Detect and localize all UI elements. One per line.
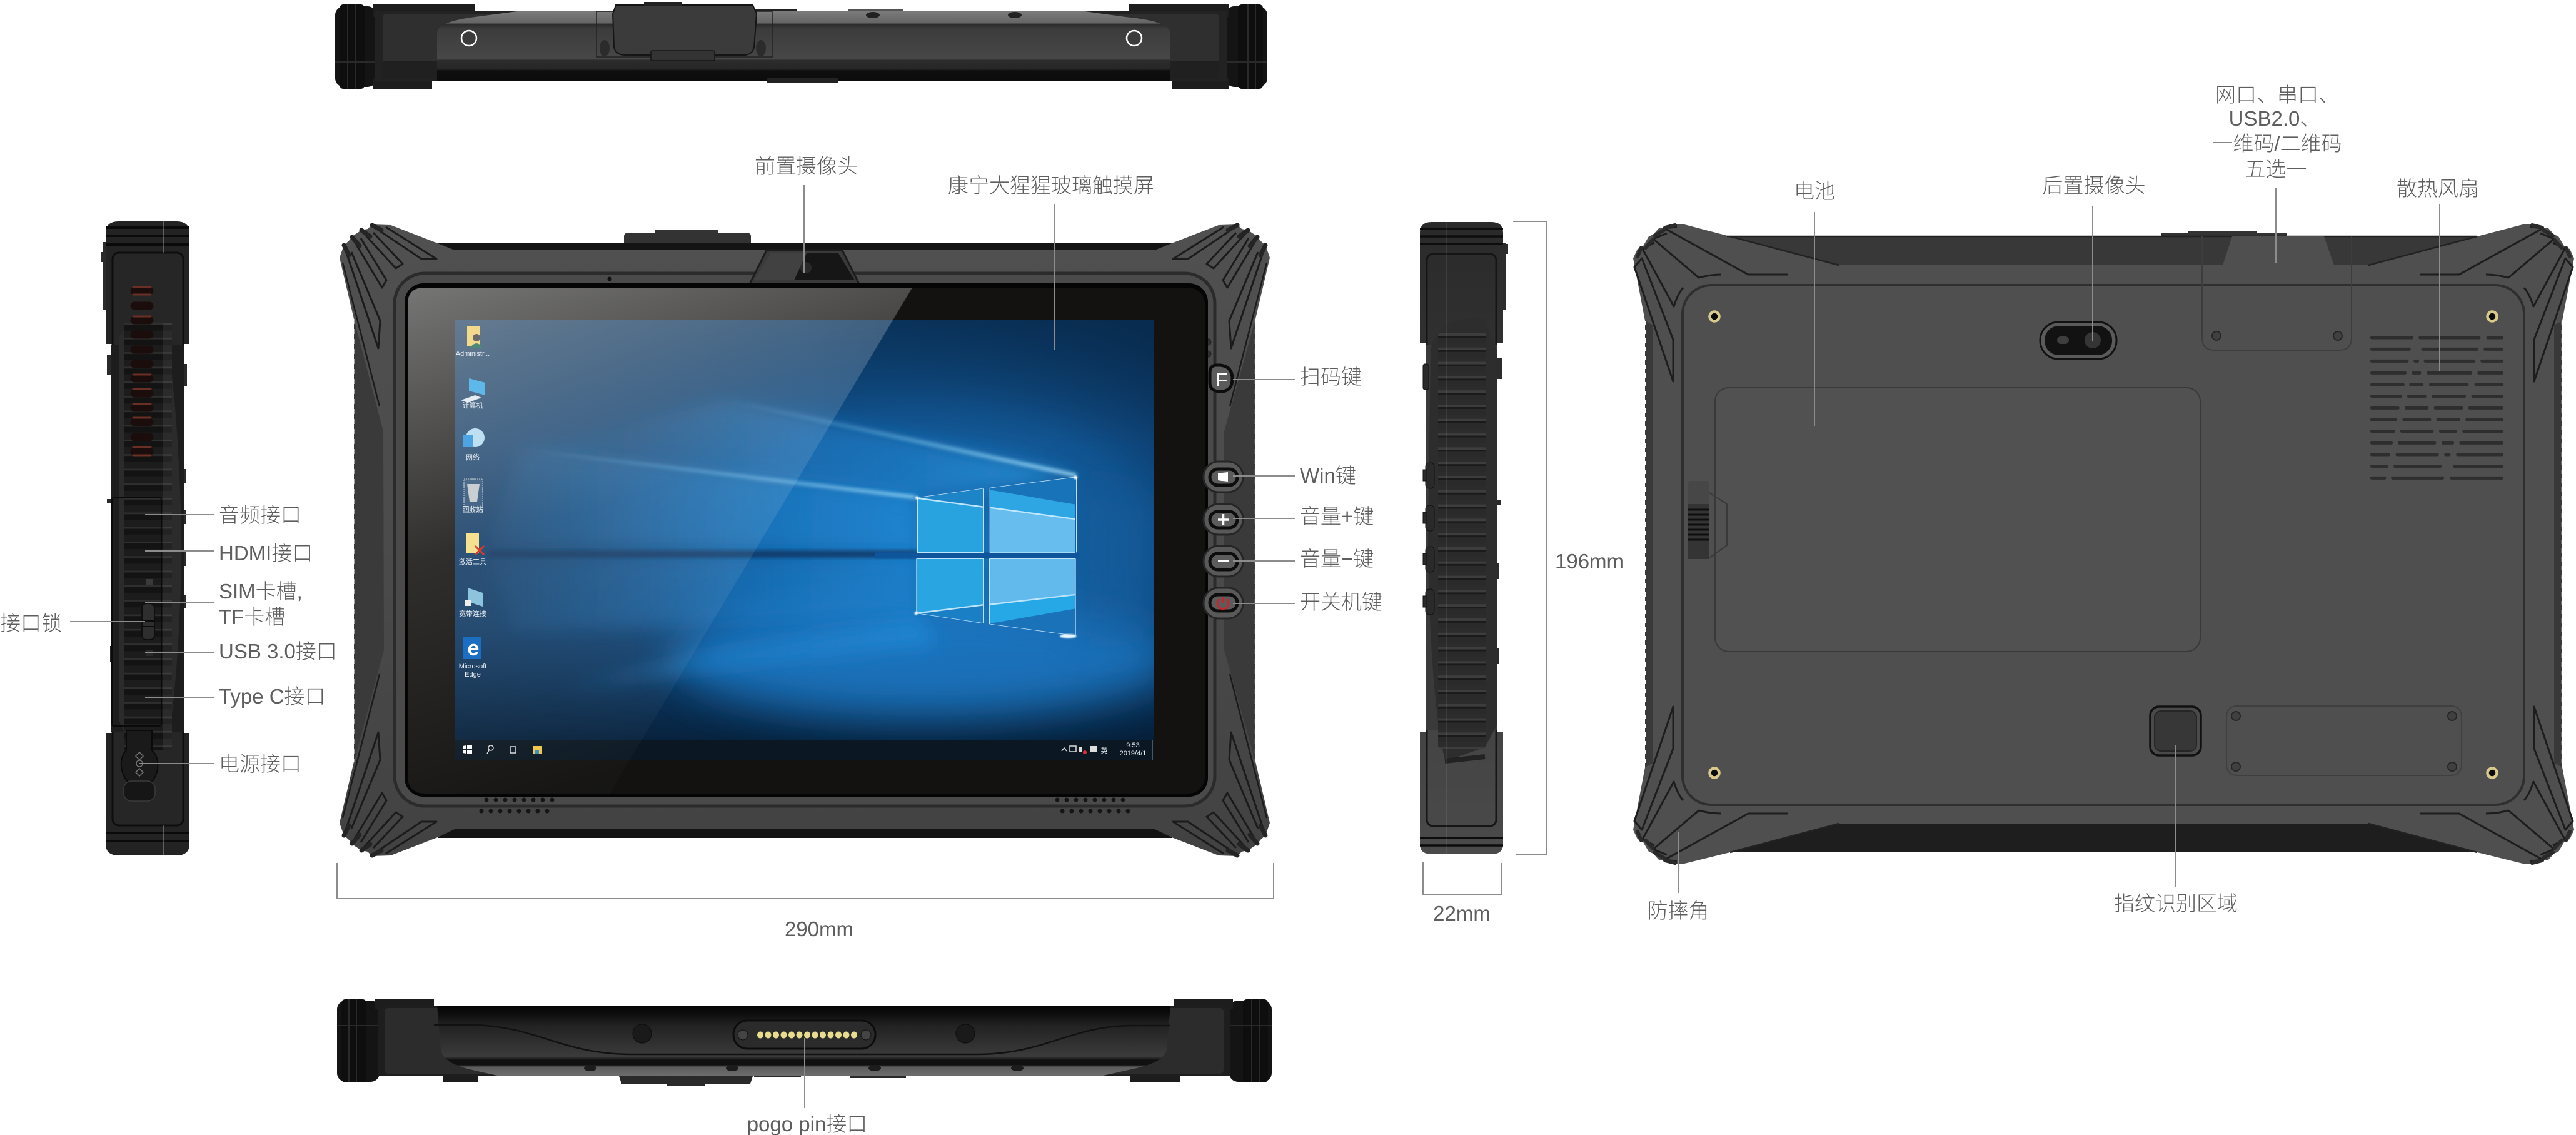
callouts: back view: 散热风扇	[2397, 177, 2479, 200]
callouts: left side view: SIM卡槽,	[219, 580, 303, 603]
callouts: left side view: USB 3.0接口	[219, 640, 337, 663]
callouts: back view	[1647, 83, 2479, 922]
end ribs	[335, 4, 1267, 89]
bulge and ribs	[119, 322, 181, 751]
black top and bottom bands	[438, 243, 1172, 838]
body	[378, 1006, 1230, 1076]
dimension: 196mm height: 196mm	[1555, 550, 1624, 573]
side buttons: F	[1216, 369, 1227, 391]
corner ribs	[343, 225, 436, 406]
taskbar icons and clock: 英	[1100, 746, 1108, 755]
inner plate	[1683, 285, 2524, 805]
callouts: left side view: Type C接口	[219, 685, 326, 708]
callouts: front view: 音量−键	[1300, 547, 1374, 570]
vents	[134, 291, 149, 451]
bottom latch	[619, 1076, 906, 1086]
right side studs	[1497, 243, 1508, 664]
side wedges	[1645, 321, 1653, 767]
desktop icons: Edge	[465, 671, 481, 678]
callouts: left side view: 电源接口	[219, 752, 301, 775]
dimension: 290mm width	[337, 863, 1274, 941]
callouts: left side view	[0, 503, 337, 775]
recessed dark bands	[1727, 236, 2477, 852]
corners	[2420, 225, 2573, 381]
callouts: back view: 防摔角	[1647, 899, 1709, 922]
knobs	[101, 242, 187, 662]
dimension: 22mm thickness	[1423, 862, 1502, 925]
desktop icons: Administr...	[456, 350, 490, 358]
callouts: back view: 电池	[1794, 179, 1835, 203]
corner blocks	[373, 4, 1229, 89]
fingerprint sensor	[2150, 707, 2201, 755]
corner blocks	[375, 999, 1233, 1082]
wallpaper	[455, 320, 1175, 740]
callouts: back view: 五选一	[2245, 158, 2307, 181]
side keys	[1423, 364, 1434, 615]
top block	[106, 221, 189, 855]
callouts: left side view: TF卡槽	[219, 605, 285, 628]
body shell	[340, 224, 1270, 856]
callouts: left side view: 接口锁	[0, 612, 62, 635]
desktop icons: 网络	[466, 453, 480, 462]
light beams	[488, 447, 917, 552]
callouts: left side view: 音频接口	[219, 503, 301, 527]
desktop icons: 回收站	[463, 505, 483, 513]
pogo pin connector	[733, 1021, 875, 1049]
desktop icons: Microsoft	[459, 663, 486, 670]
dimension: 290mm width: 290mm	[785, 917, 853, 941]
dimension: 196mm height	[1513, 221, 1624, 854]
taskbar icons and clock: 2019/4/1	[1120, 750, 1146, 757]
callouts: left side view: HDMI接口	[219, 542, 313, 565]
callouts: front view: Win键	[1300, 464, 1356, 487]
port door, lock	[112, 498, 161, 726]
microphone dots	[608, 276, 611, 281]
bottom right panel	[2226, 706, 2462, 775]
bezel ring	[395, 273, 1215, 806]
callouts: back view: 指纹识别区域	[2114, 892, 2238, 915]
top centre tab	[2223, 236, 2334, 265]
view: right side of tablet	[1420, 222, 1508, 854]
recess curve	[434, 1025, 1170, 1054]
desktop icons: 激活工具	[459, 557, 486, 566]
callouts: front view: 前置摄像头	[755, 154, 858, 178]
glass reflection	[408, 288, 912, 794]
taskbar icons and clock: 9:53	[1126, 742, 1140, 749]
touch screen	[405, 283, 1208, 797]
dimension: 22mm thickness: 22mm	[1433, 902, 1491, 925]
view: front of tablet	[340, 224, 1270, 856]
battery cover	[1688, 388, 2200, 652]
fan vents	[2372, 338, 2502, 478]
camera housing	[750, 250, 859, 284]
callouts: front view: 扫码键	[1300, 365, 1362, 388]
speaker holes	[479, 798, 1130, 813]
callouts: front view: 康宁大猩猩玻璃触摸屏	[948, 174, 1154, 197]
round feet	[633, 1024, 975, 1043]
callouts: back view: 网口、串口、	[2215, 83, 2339, 106]
small slots and buttons	[753, 9, 1022, 83]
top button bump	[624, 230, 751, 243]
grip bulge and ribs	[1428, 318, 1497, 761]
rear camera	[2040, 322, 2116, 359]
block body	[1420, 222, 1503, 854]
shell	[1633, 224, 2574, 864]
view: left side of tablet	[101, 221, 189, 855]
taskbar	[455, 740, 1154, 760]
window logo panes	[875, 475, 1080, 638]
latch cover	[596, 2, 772, 61]
view: bottom edge of tablet	[337, 999, 1272, 1086]
top bump	[2161, 231, 2287, 236]
view: top edge of tablet	[335, 2, 1267, 89]
callouts: back view: 后置摄像头	[2042, 174, 2146, 197]
edge screws	[584, 1065, 1024, 1071]
end ribs	[337, 999, 1272, 1082]
desktop icons: 计算机	[463, 401, 483, 410]
desktop icons	[456, 326, 490, 678]
taskbar icons and clock	[463, 740, 1152, 760]
gold holes	[1709, 311, 2497, 778]
body	[375, 11, 1227, 81]
callout: pogo pin: pogo pin接口	[747, 1112, 867, 1135]
side wedges	[354, 319, 384, 762]
screw rings	[461, 31, 1142, 46]
callouts: front view: 开关机键	[1300, 590, 1382, 613]
side buttons	[1204, 365, 1243, 618]
callouts: front view: 音量+键	[1300, 505, 1374, 528]
callouts: front view	[755, 154, 1382, 613]
callouts: back view: USB2.0、	[2229, 107, 2320, 130]
desktop icons: e	[468, 637, 479, 660]
desktop icons: 宽带连接	[459, 609, 486, 618]
top right port panel	[2202, 236, 2352, 350]
power port cap	[121, 730, 158, 790]
callouts: back view: 一维码/二维码	[2212, 132, 2342, 155]
view: back of tablet	[1633, 224, 2574, 864]
